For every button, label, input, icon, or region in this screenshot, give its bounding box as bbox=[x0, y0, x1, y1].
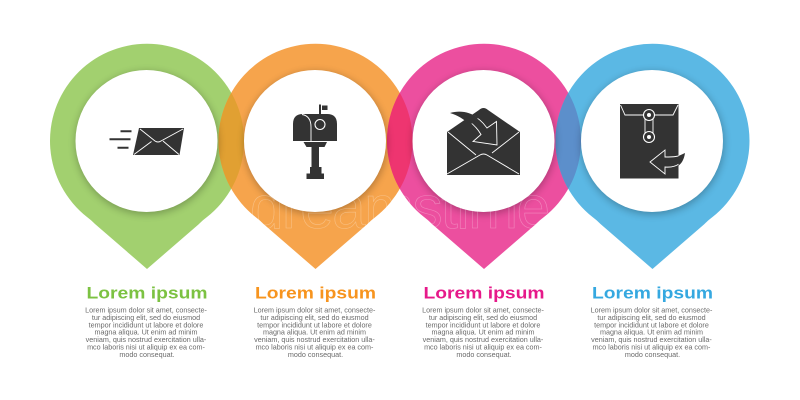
text block: column 1: mco laboris nisi ut aliquip ex ea com- bbox=[87, 342, 206, 351]
text block: column 3: veniam, quis nostrud exercitation ulla- bbox=[423, 335, 544, 344]
text block: column 4: tempor incididunt ut labore et dolore bbox=[594, 320, 709, 329]
text block: column 4: mco laboris nisi ut aliquip ex ea com- bbox=[593, 342, 711, 351]
text block: column 4: veniam, quis nostrud exercitation ulla- bbox=[591, 335, 712, 344]
text block: column 1: tur adipiscing elit, sed do eiusmod bbox=[92, 313, 200, 322]
text block: column 3: mco laboris nisi ut aliquip ex ea com- bbox=[424, 342, 543, 351]
text block: column 4: modo consequat. bbox=[625, 350, 680, 359]
icon: mailbox bbox=[293, 104, 337, 179]
text block: column 1: tempor incididunt ut labore et dolore bbox=[89, 320, 203, 329]
text block: column 2: tur adipiscing elit, sed do eiusmod bbox=[260, 313, 369, 322]
text block: column 1: magna aliqua. Ut enim ad minim bbox=[94, 328, 198, 337]
white circles with shadows bbox=[76, 70, 724, 214]
text block: column 2: mco laboris nisi ut aliquip ex ea com- bbox=[256, 342, 374, 351]
heading: column 2: Lorem ipsum bbox=[255, 284, 376, 302]
text block: column 3: Lorem ipsum dolor sit amet, consecte- bbox=[422, 306, 545, 314]
text block: column 1: veniam, quis nostrud exercitation ulla- bbox=[86, 335, 207, 344]
icon: flying envelope bbox=[110, 128, 184, 155]
icon: document envelope with return arrow bbox=[620, 104, 685, 178]
panel: green pin bbox=[50, 44, 244, 269]
text block: column 4: tur adipiscing elit, sed do eiusmod bbox=[597, 313, 706, 322]
text block: column 2: Lorem ipsum dolor sit amet, consecte- bbox=[254, 306, 376, 314]
text block: column 4: Lorem ipsum dolor sit amet, consecte- bbox=[591, 306, 713, 314]
heading: column 1: Lorem ipsum bbox=[86, 284, 208, 302]
icon: open envelope with arrow bbox=[447, 108, 520, 175]
heading: column 3: Lorem ipsum bbox=[424, 284, 544, 302]
text block: column 1: Lorem ipsum dolor sit amet, consecte- bbox=[85, 306, 208, 314]
text block: column 4: magna aliqua. Ut enim ad minim bbox=[600, 328, 703, 337]
text block: column 2: tempor incididunt ut labore et dolore bbox=[257, 320, 372, 329]
text block: column 1: modo consequat. bbox=[119, 350, 175, 359]
text block: column 2: veniam, quis nostrud exercitation ulla- bbox=[254, 335, 375, 344]
text block: column 2: modo consequat. bbox=[288, 350, 343, 359]
text block: column 2: magna aliqua. Ut enim ad minim bbox=[263, 328, 366, 337]
text block: column 3: magna aliqua. Ut enim ad minim bbox=[431, 328, 535, 337]
panel: pink pin bbox=[387, 44, 581, 269]
heading: column 4: Lorem ipsum bbox=[592, 284, 713, 302]
watermark: dreamstime bbox=[250, 174, 550, 241]
panel: blue pin bbox=[556, 44, 750, 269]
panel: orange pin bbox=[218, 44, 412, 269]
text block: column 3: modo consequat. bbox=[456, 350, 512, 359]
text block: column 3: tur adipiscing elit, sed do eiusmod bbox=[429, 313, 537, 322]
text block: column 3: tempor incididunt ut labore et dolore bbox=[426, 320, 540, 329]
